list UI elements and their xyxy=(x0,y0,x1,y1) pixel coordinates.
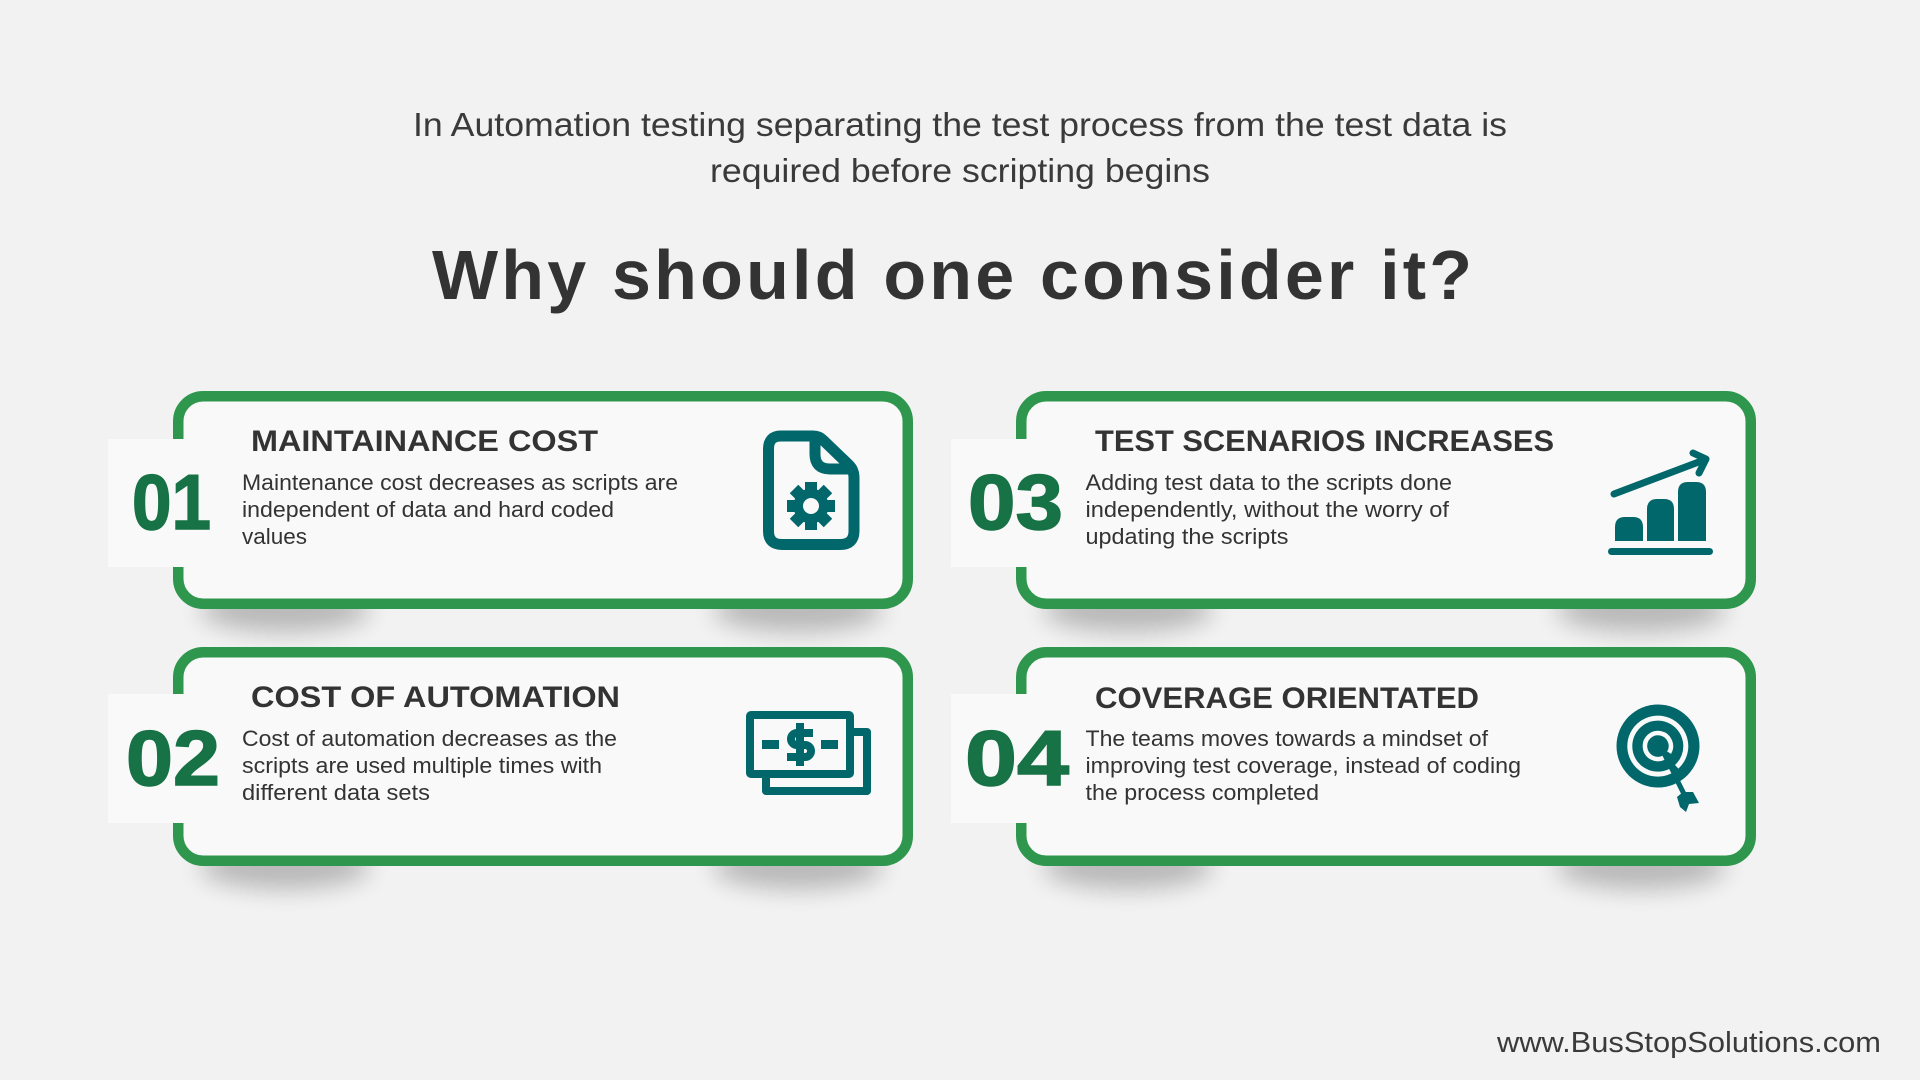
number 02: 02 xyxy=(126,714,220,802)
heading: TEST SCENARIOS INCREASES xyxy=(1095,425,1554,458)
body text: the process completed xyxy=(1086,780,1319,805)
body text: values xyxy=(242,524,307,549)
body text: independent of data and hard coded xyxy=(242,497,614,522)
icon: target with dart xyxy=(1616,704,1700,812)
panel: 01 maintainance cost xyxy=(108,396,908,632)
icon: document with gear xyxy=(768,436,854,544)
body text xyxy=(242,470,678,549)
body text: scripts are used multiple times with xyxy=(242,753,602,778)
body text xyxy=(242,726,617,805)
body text: Maintenance cost decreases as scripts are xyxy=(242,470,678,495)
heading: COST OF AUTOMATION xyxy=(251,681,620,714)
title: Why should one consider it? xyxy=(432,236,1472,314)
body text xyxy=(1086,470,1452,549)
intro text: required before scripting begins xyxy=(710,152,1210,189)
panel: 02 cost of automation xyxy=(108,652,908,889)
heading: COVERAGE ORIENTATED xyxy=(1095,682,1479,715)
intro text xyxy=(413,106,1507,189)
body text: independently, without the worry of xyxy=(1086,497,1450,522)
body text: Adding test data to the scripts done xyxy=(1086,470,1452,495)
body text: different data sets xyxy=(242,780,430,805)
icon: banknotes xyxy=(750,715,867,791)
number 04: 04 xyxy=(965,714,1069,802)
number 01: 01 xyxy=(132,458,211,546)
icon: growth chart xyxy=(1608,453,1713,555)
panel: 04 coverage orientated xyxy=(951,652,1751,889)
body text: improving test coverage, instead of coding xyxy=(1086,753,1521,778)
body text xyxy=(1086,726,1521,805)
heading: MAINTAINANCE COST xyxy=(251,425,598,458)
body text: updating the scripts xyxy=(1086,524,1288,549)
body text: The teams moves towards a mindset of xyxy=(1086,726,1489,751)
number 03: 03 xyxy=(968,458,1063,546)
body text: Cost of automation decreases as the xyxy=(242,726,617,751)
panel: 03 test scenarios increases xyxy=(951,396,1751,632)
footer website: www.BusStopSolutions.com xyxy=(1496,1027,1881,1059)
intro text: In Automation testing separating the test process from the test data is xyxy=(413,106,1507,143)
